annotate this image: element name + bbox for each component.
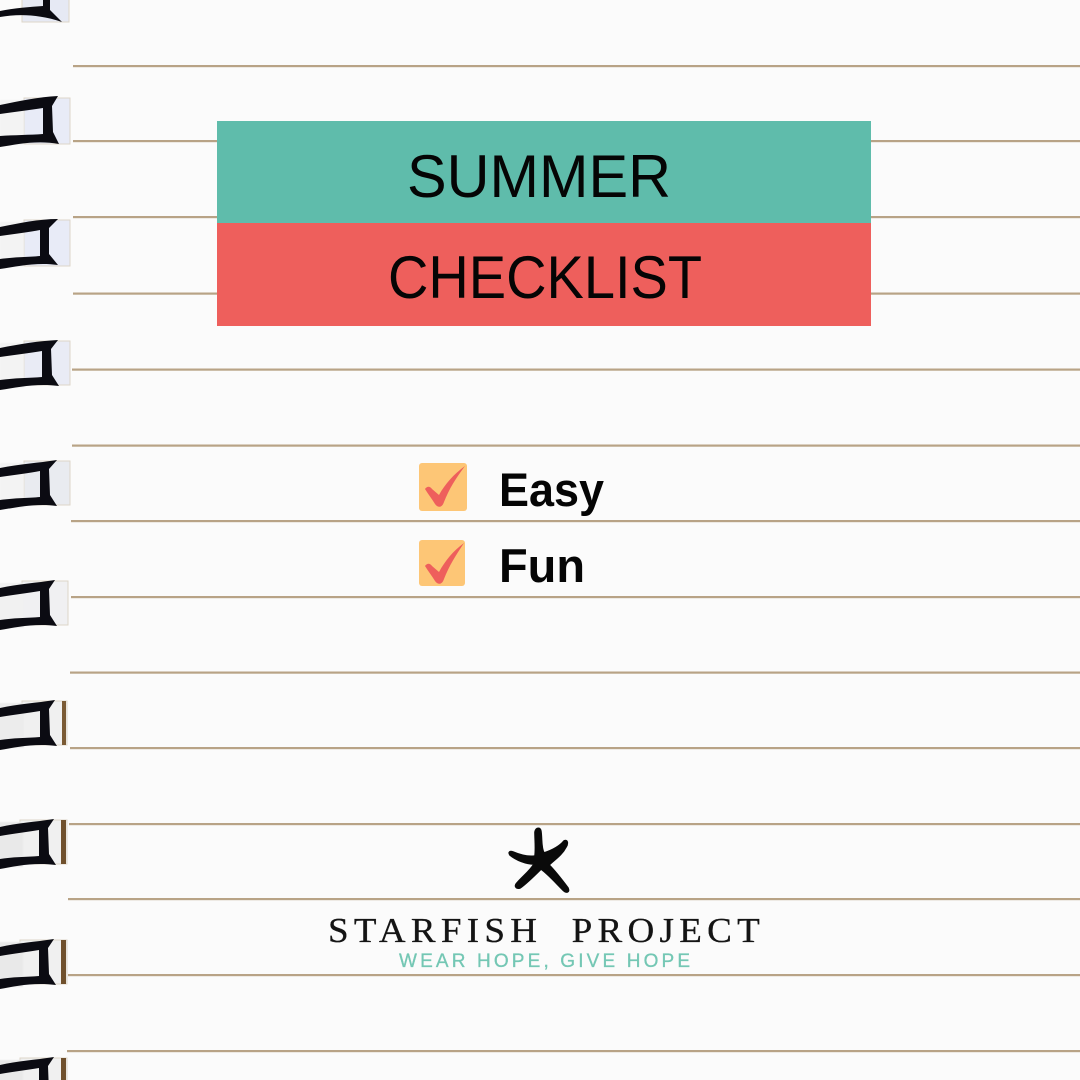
title banner (217, 121, 871, 326)
label: easy: Easy (499, 463, 604, 516)
item: fun (419, 539, 585, 592)
icon: checkbox fun (419, 540, 465, 586)
ring 10 (0, 1057, 67, 1080)
item: easy (419, 463, 604, 516)
title band: summer: SUMMER (407, 143, 671, 210)
title band: checklist (217, 223, 871, 326)
ring 1 (0, 0, 69, 22)
title band: summer (217, 121, 871, 224)
spiral binding (0, 0, 70, 1080)
ring 8 (0, 819, 67, 869)
ring 6 (0, 580, 68, 630)
checklist items (419, 463, 604, 592)
ring 3 (0, 219, 70, 269)
label: fun: Fun (499, 539, 585, 592)
ring 2 (0, 96, 70, 147)
logo: starfish project (328, 828, 765, 972)
logo tagline: WEAR HOPE, GIVE HOPE (399, 951, 690, 972)
ring 5 (0, 460, 70, 510)
icon: checkbox easy (419, 463, 467, 511)
ring 9 (0, 939, 67, 989)
logo wordmark: STARFISH PROJECT (328, 911, 765, 950)
title band: checklist: CHECKLIST (388, 244, 702, 311)
ring 4 (0, 340, 70, 390)
icon: starfish (509, 828, 569, 892)
ring 7 (0, 700, 67, 750)
